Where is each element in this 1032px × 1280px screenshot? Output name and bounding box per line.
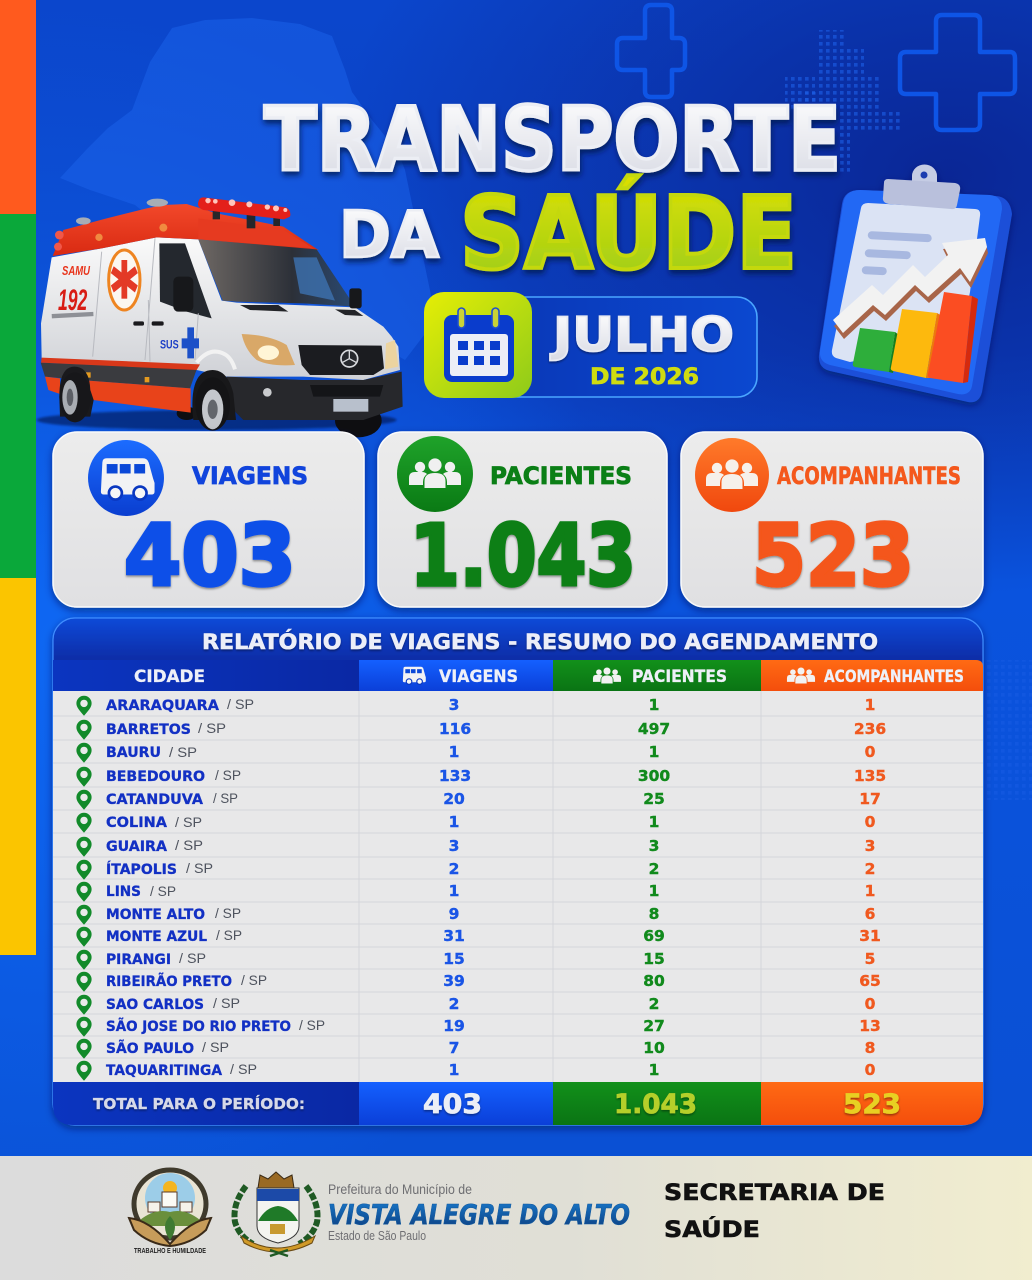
totals row: 403 xyxy=(423,1089,482,1120)
row: Sao Carlos xyxy=(76,995,876,1015)
row: Catanduva: 20 xyxy=(443,790,465,808)
SUS mark xyxy=(160,327,199,358)
row: Sao Jose do Rio Preto: / SP xyxy=(299,1018,325,1033)
row: Catanduva: 25 xyxy=(643,790,665,808)
icon: patients group xyxy=(397,436,473,512)
department name: SECRETARIA DE xyxy=(664,1180,885,1206)
row: Colina: / SP xyxy=(175,815,202,830)
prefecture wordmark: Prefeitura do Município de xyxy=(328,1181,472,1197)
row: Taquaritinga: / SP xyxy=(230,1062,257,1077)
row: Itapolis: 2 xyxy=(449,860,459,878)
table body xyxy=(53,691,983,1082)
row: Itapolis: ÍTAPOLIS xyxy=(106,861,177,878)
row: Itapolis: 2 xyxy=(865,860,875,878)
department name: SAÚDE xyxy=(664,1215,760,1243)
prefecture wordmark xyxy=(328,1181,630,1243)
row: Sao Carlos: SAO CARLOS xyxy=(106,997,204,1013)
SUS mark: SUS xyxy=(160,338,179,352)
body shell xyxy=(41,237,400,380)
icon: calendar xyxy=(424,292,532,398)
department name xyxy=(664,1180,885,1243)
row: Lins: 1 xyxy=(865,882,875,900)
row: Monte Azul: MONTE AZUL xyxy=(106,929,207,945)
row: Pirangi xyxy=(76,950,875,970)
title xyxy=(264,88,841,292)
row: Sao Jose do Rio Preto: 13 xyxy=(859,1017,881,1035)
prefecture wordmark: VISTA ALEGRE DO ALTO xyxy=(328,1198,630,1231)
side window xyxy=(159,243,212,318)
dotted world map pattern xyxy=(785,30,1032,800)
totals row: 523 xyxy=(843,1089,901,1120)
row: Barretos: 236 xyxy=(854,720,886,738)
row: Araraquara xyxy=(76,696,875,716)
SAMU label: SAMU xyxy=(62,263,90,278)
row: Lins: 1 xyxy=(649,882,659,900)
row: Pirangi: / SP xyxy=(179,951,206,966)
row: Bauru xyxy=(76,743,876,763)
row: Catanduva xyxy=(76,790,881,810)
row: Araraquara: 1 xyxy=(865,696,875,714)
row: Ribeirao Preto xyxy=(76,972,881,992)
row: Monte Alto: 9 xyxy=(449,905,459,923)
row: Sao Jose do Rio Preto: 19 xyxy=(443,1017,465,1035)
row: Sao Paulo: / SP xyxy=(202,1040,229,1055)
row: Bebedouro xyxy=(76,767,886,787)
table header row: VIAGENS xyxy=(439,667,518,686)
row: Catanduva: 17 xyxy=(859,790,881,808)
red roof xyxy=(53,204,318,256)
label: PACIENTES xyxy=(490,462,632,490)
row: Guaira: GUAIRA xyxy=(106,839,167,855)
table title: RELATÓRIO DE VIAGENS - RESUMO DO AGENDAMENTO xyxy=(202,629,878,655)
panel lines xyxy=(93,238,235,369)
prefecture wordmark: Estado de São Paulo xyxy=(328,1228,426,1243)
row: Araraquara: 1 xyxy=(649,696,659,714)
row: Lins xyxy=(76,882,875,902)
row: Monte Azul: / SP xyxy=(216,928,242,943)
SAMU label xyxy=(58,263,90,317)
row: Sao Jose do Rio Preto xyxy=(76,1017,881,1037)
row: Barretos: 116 xyxy=(439,720,471,738)
row: Colina: COLINA xyxy=(106,815,167,831)
row: Monte Alto: 6 xyxy=(865,905,875,923)
row: Sao Carlos: 2 xyxy=(449,995,459,1013)
row: Bauru: 1 xyxy=(449,743,459,761)
icon: bus xyxy=(88,440,164,516)
illustration: ambulance xyxy=(37,197,403,437)
row: Bauru: 0 xyxy=(865,743,876,761)
month label: JULHO xyxy=(550,308,734,363)
row: Lins: LINS xyxy=(106,884,141,900)
row: Taquaritinga: 1 xyxy=(649,1061,659,1079)
row: Taquaritinga xyxy=(76,1061,876,1081)
row: Sao Paulo xyxy=(76,1039,875,1059)
row: Bauru: BAURU xyxy=(106,745,161,761)
row: Sao Carlos: 0 xyxy=(865,995,876,1013)
row: Sao Paulo: 7 xyxy=(449,1039,459,1057)
front wheel xyxy=(192,370,236,431)
row: Ribeirao Preto: 80 xyxy=(643,972,665,990)
row: Araraquara: / SP xyxy=(227,697,254,712)
row: Catanduva: CATANDUVA xyxy=(106,792,203,808)
row: Guaira: 3 xyxy=(449,837,459,855)
rear wheel xyxy=(59,367,94,422)
star of life emblem xyxy=(109,250,140,310)
row: Lins: 1 xyxy=(449,882,459,900)
city coat of arms xyxy=(234,1172,318,1256)
row: Colina: 1 xyxy=(449,813,459,831)
panel: viagens xyxy=(53,432,364,607)
rear skirt xyxy=(41,358,200,413)
row: Itapolis: / SP xyxy=(186,861,213,876)
row: Colina: 1 xyxy=(649,813,659,831)
icon: clipboard with chart xyxy=(819,165,1012,402)
grille xyxy=(298,345,384,375)
row: Ribeirao Preto: RIBEIRÃO PRETO xyxy=(106,973,232,990)
map of São Paulo state xyxy=(60,18,432,360)
row: Taquaritinga: 1 xyxy=(449,1061,459,1079)
month badge xyxy=(424,292,757,398)
row: Ribeirao Preto: / SP xyxy=(241,973,267,988)
icon: companions group xyxy=(695,438,769,512)
decorative plus outlines xyxy=(617,5,1015,130)
table header row: ACOMPANHANTES xyxy=(824,667,964,686)
hood vents xyxy=(240,305,363,316)
row: Colina: 0 xyxy=(865,813,876,831)
row: Ribeirao Preto: 39 xyxy=(443,972,465,990)
row: Ribeirao Preto: 65 xyxy=(859,972,881,990)
municipal seal logo xyxy=(129,1170,211,1255)
row: Guaira: 3 xyxy=(649,837,659,855)
row: Monte Alto: 8 xyxy=(649,905,659,923)
light bar xyxy=(198,197,290,228)
row: Pirangi: PIRANGI xyxy=(106,952,171,968)
totals row: TOTAL PARA O PERÍODO: xyxy=(93,1094,305,1113)
row: Colina xyxy=(76,813,876,833)
row: Taquaritinga: TAQUARITINGA xyxy=(106,1063,222,1079)
label: ACOMPANHANTES xyxy=(777,462,961,490)
row: Pirangi: 5 xyxy=(865,950,875,968)
mirrors xyxy=(173,277,362,312)
row: Sao Jose do Rio Preto: 27 xyxy=(643,1017,665,1035)
row: Guaira: 3 xyxy=(865,837,875,855)
row: Catanduva: / SP xyxy=(213,791,238,806)
row: Sao Carlos: / SP xyxy=(213,996,240,1011)
panel: pacientes xyxy=(378,432,667,607)
row: Sao Paulo: 8 xyxy=(865,1039,875,1057)
label: VIAGENS xyxy=(192,462,308,490)
row: Sao Carlos: 2 xyxy=(649,995,659,1013)
table header row: CIDADE xyxy=(134,667,205,686)
row: Sao Paulo: 10 xyxy=(643,1039,665,1057)
row: Monte Azul: 31 xyxy=(859,927,881,945)
brand colour stripes xyxy=(0,0,36,955)
row: Pirangi: 15 xyxy=(643,950,665,968)
row: Monte Azul: 31 xyxy=(443,927,465,945)
row: Itapolis xyxy=(76,860,875,880)
panel: travel report table xyxy=(53,618,983,1125)
licence plate xyxy=(333,399,368,412)
row: Sao Jose do Rio Preto: SÃO JOSE DO RIO PRETO xyxy=(106,1018,291,1035)
title: DA xyxy=(339,199,439,273)
headlights xyxy=(242,334,398,369)
panel: acompanhantes xyxy=(681,432,983,607)
totals row xyxy=(53,1082,983,1125)
row: Barretos: / SP xyxy=(198,721,226,736)
row: Itapolis: 2 xyxy=(649,860,659,878)
row: Guaira: / SP xyxy=(175,838,203,853)
year label: DE 2026 xyxy=(590,365,699,390)
row: Bauru: 1 xyxy=(649,743,659,761)
value: 403 xyxy=(124,507,296,606)
value: 523 xyxy=(752,507,914,606)
row: Taquaritinga: 0 xyxy=(865,1061,876,1079)
row: Monte Alto: MONTE ALTO xyxy=(106,907,205,923)
row: Barretos xyxy=(76,720,886,740)
value: 1.043 xyxy=(410,507,636,606)
row: Araraquara: ARARAQUARA xyxy=(106,698,219,714)
row: Monte Azul xyxy=(76,927,881,947)
row: Monte Alto: / SP xyxy=(215,906,241,921)
windshield xyxy=(198,239,355,307)
row: Bebedouro: / SP xyxy=(215,768,241,783)
row: Bebedouro: 133 xyxy=(439,767,471,785)
row: Bebedouro: 135 xyxy=(854,767,886,785)
row: Bauru: / SP xyxy=(169,745,197,760)
municipal seal logo: TRABALHO E HUMILDADE xyxy=(134,1246,206,1255)
row: Lins: / SP xyxy=(150,884,176,899)
totals row: 1.043 xyxy=(614,1089,697,1120)
far wheels xyxy=(177,404,382,437)
row: Monte Azul: 69 xyxy=(643,927,665,945)
row: Bebedouro: 300 xyxy=(638,767,670,785)
row: Barretos: 497 xyxy=(638,720,670,738)
SAMU label: 192 xyxy=(58,284,88,317)
table header row xyxy=(53,660,983,691)
row: Guaira xyxy=(76,837,875,857)
table header row: PACIENTES xyxy=(632,667,727,686)
title: TRANSPORTE xyxy=(264,88,841,191)
row: Monte Alto xyxy=(76,905,875,925)
row: Sao Paulo: SÃO PAULO xyxy=(106,1040,194,1057)
row: Pirangi: 15 xyxy=(443,950,465,968)
row: Bebedouro: BEBEDOURO xyxy=(106,769,205,785)
row: Barretos: BARRETOS xyxy=(106,722,191,738)
row: Araraquara: 3 xyxy=(449,696,459,714)
front bumper xyxy=(227,372,403,420)
title: SAÚDE xyxy=(460,175,797,292)
footer xyxy=(0,1156,1032,1280)
